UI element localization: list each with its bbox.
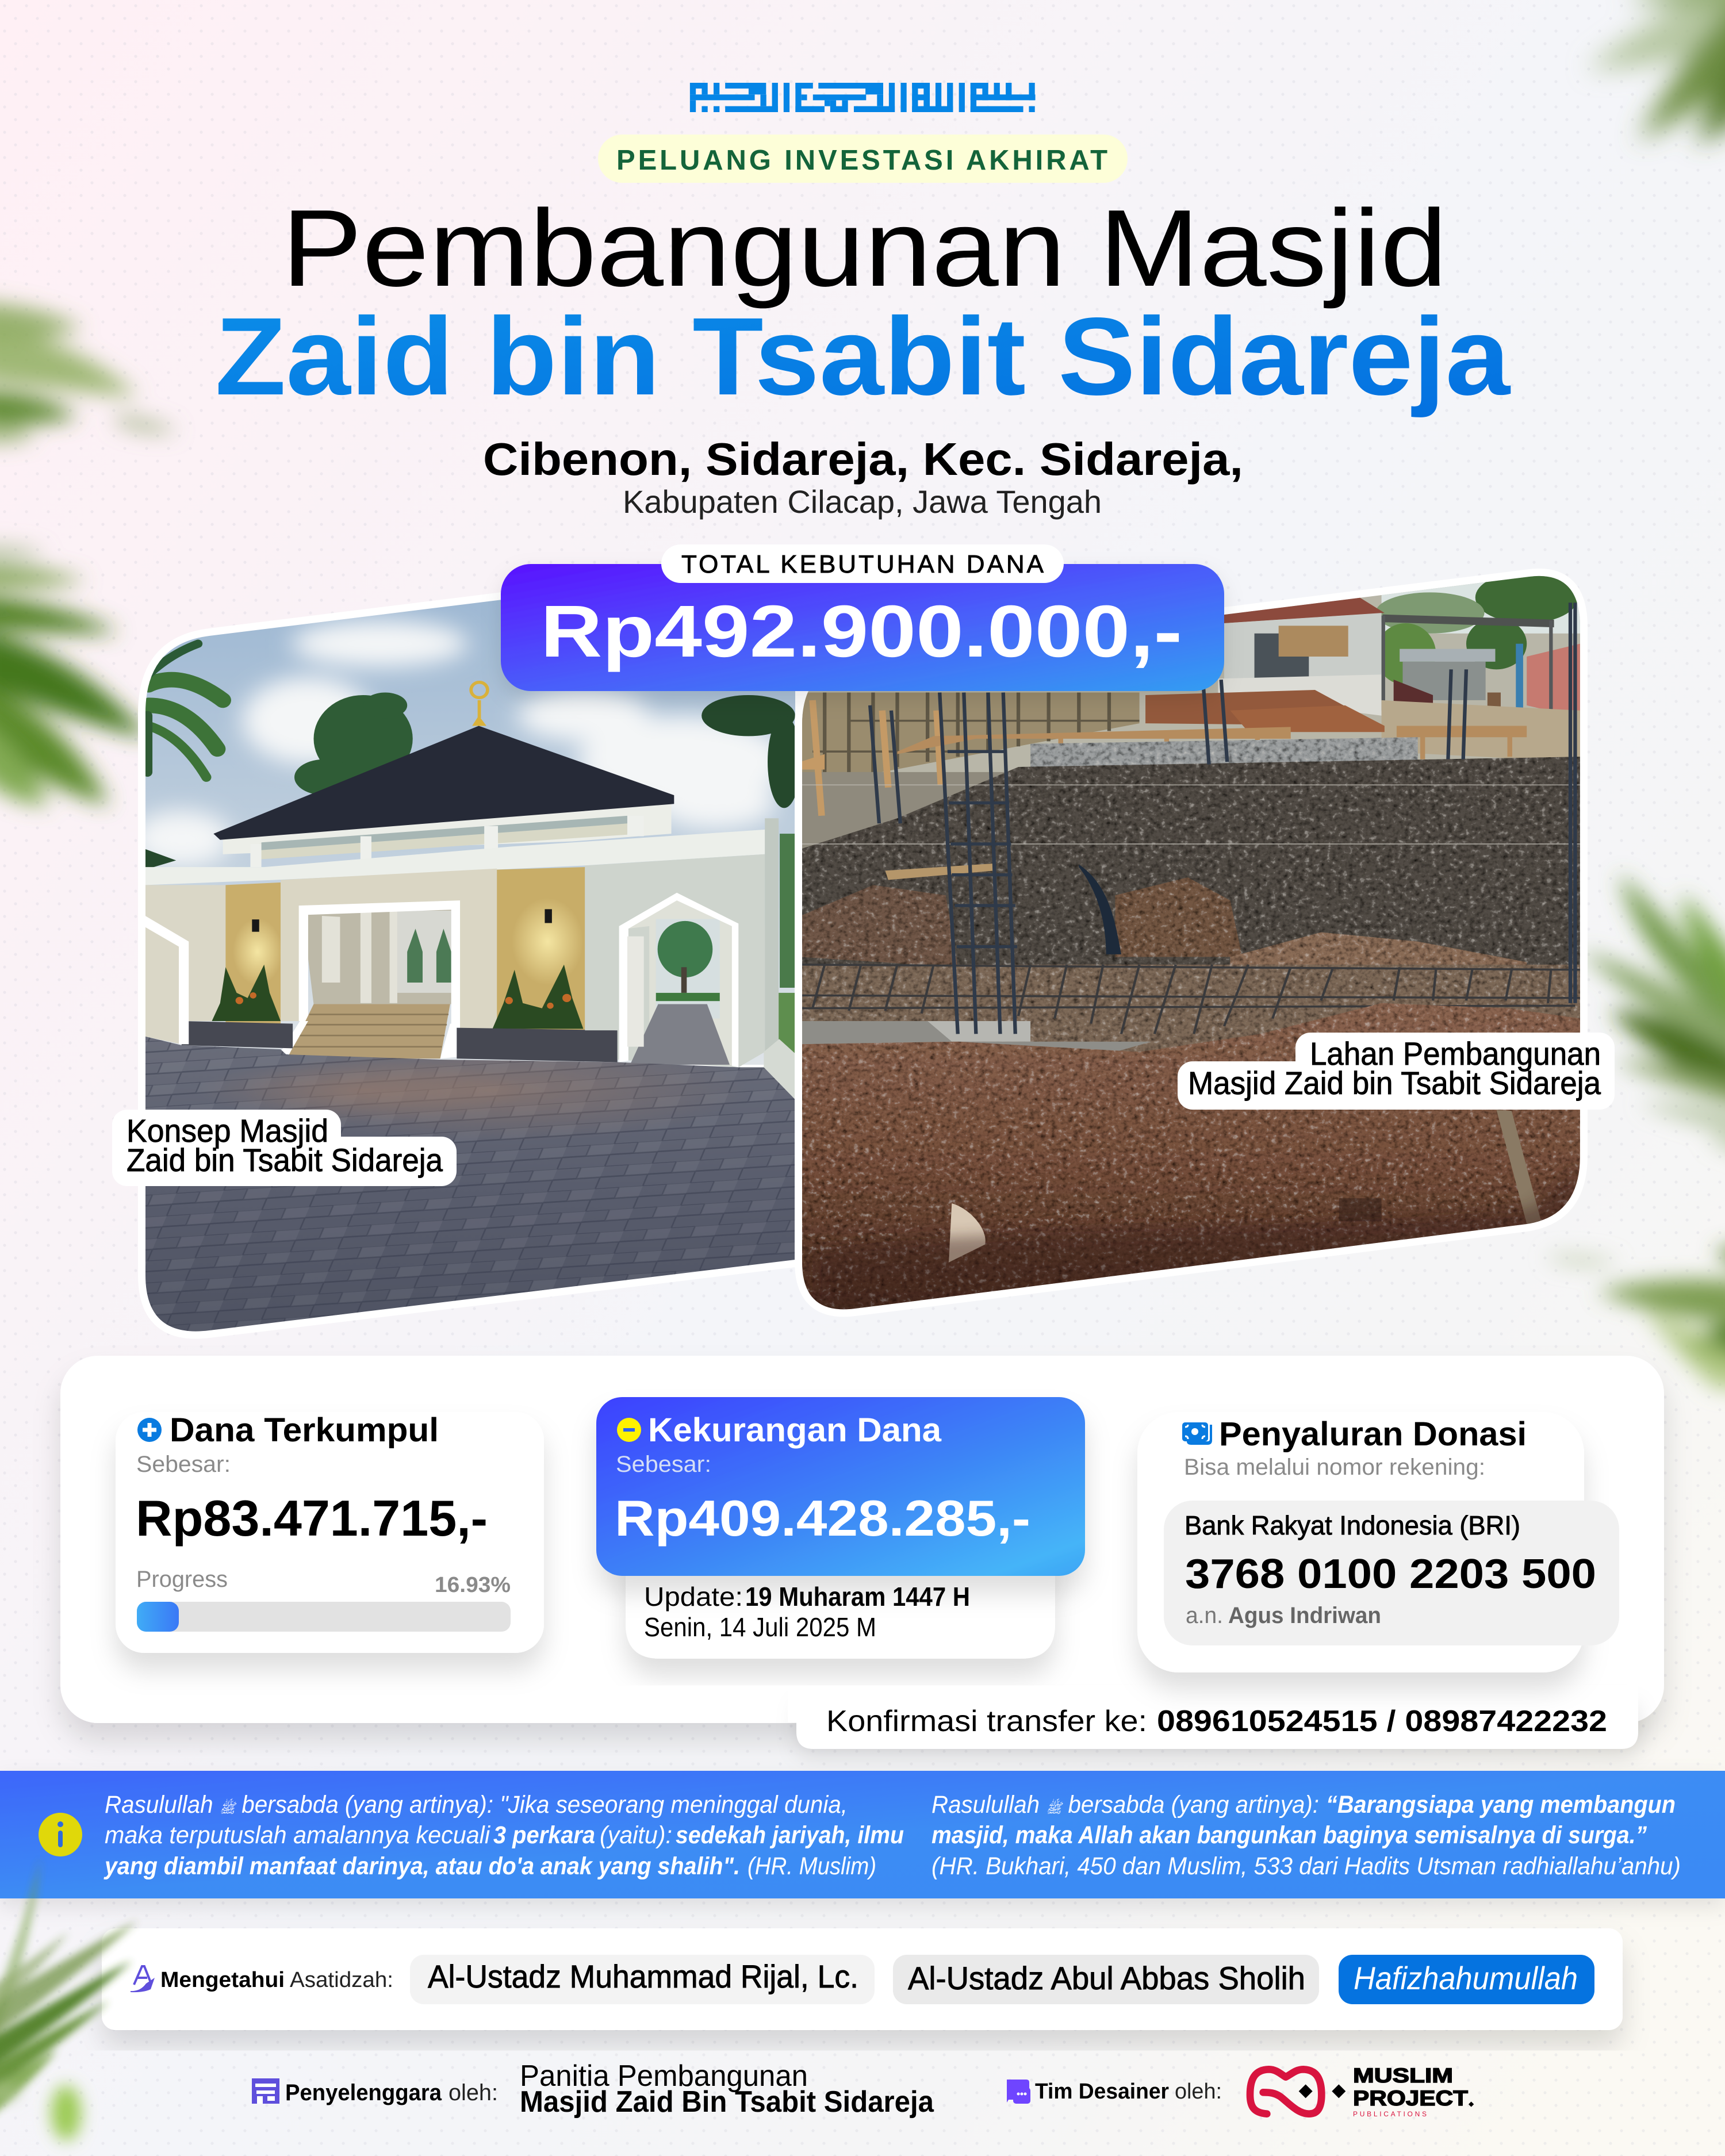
- designer credit: oleh:: [1175, 2080, 1222, 2104]
- icon: minus: [617, 1418, 641, 1442]
- location heading: [483, 433, 1243, 520]
- quote: building a mosque: Rasulullah ﷺ bersabda (yang artinya):: [931, 1791, 1319, 1819]
- bank account box: Agus Indriwan: [1228, 1603, 1381, 1628]
- card: donation channel: Bisa melalui nomor rekening:: [1184, 1455, 1485, 1480]
- location heading: Cibenon, Sidareja, Kec. Sidareja,: [483, 433, 1243, 485]
- caption: construction site: [1178, 1033, 1615, 1110]
- logo: muslim project: [1250, 2065, 1474, 2118]
- title: Pembangunan Masjid: [282, 187, 1447, 309]
- photo: mosque concept: [132, 563, 803, 1368]
- card: donation channel: [1137, 1412, 1619, 1672]
- icon: plus: [137, 1418, 162, 1442]
- organizer credit: Panitia Pembangunan: [520, 2059, 808, 2093]
- bank account box: a.n.: [1186, 1603, 1223, 1628]
- chip: scholar one: Al-Ustadz Muhammad Rijal, Lc.: [428, 1958, 858, 1994]
- icon: banknote: [1182, 1422, 1212, 1445]
- card: donation channel: Penyaluran Donasi: [1219, 1415, 1527, 1453]
- leaf: right: [1581, 874, 1725, 1156]
- logo: muslim project: MUSLIM: [1353, 2065, 1453, 2087]
- caption: mosque concept: Konsep Masjid: [126, 1112, 328, 1149]
- leaf: middle left: [0, 546, 150, 805]
- logo: muslim project: PROJECT: [1353, 2086, 1468, 2110]
- quote: three deeds: [103, 1791, 904, 1880]
- quote: building a mosque: masjid, maka Allah akan bangunkan baginya semisalnya di surga.”: [931, 1821, 1647, 1849]
- panel: funding: [60, 1356, 1664, 1749]
- card: update date: Update:: [644, 1582, 743, 1612]
- panel: endorsing scholars: Mengetahui: [160, 1968, 285, 1992]
- quote: three deeds: yang diambil manfaat darinya, atau do'a anak yang shalih".: [103, 1852, 740, 1880]
- quote: building a mosque: (HR. Bukhari, 450 dan Muslim, 533 dari Hadits Utsman radhiallahu’anhu): [931, 1852, 1681, 1880]
- quote: building a mosque: “Barangsiapa yang membangun: [1326, 1791, 1676, 1819]
- quote: three deeds: (HR. Muslim): [747, 1852, 876, 1880]
- icon: bismillah calligraphy: [690, 83, 1035, 112]
- quote: three deeds: sedekah jariyah, ilmu: [676, 1821, 904, 1849]
- icon: chat robot: [1007, 2080, 1030, 2104]
- panel: endorsing scholars: Asatidzah:: [290, 1968, 393, 1992]
- logo: muslim project: PUBLICATIONS: [1353, 2110, 1427, 2118]
- band: hadith quotes: [0, 1771, 1725, 1898]
- total fund callout: TOTAL KEBUTUHAN DANA: [681, 550, 1044, 578]
- card: funds collected: [116, 1411, 544, 1653]
- leaf: lower right: [1548, 1247, 1725, 1390]
- card: funds collected: Sebesar:: [136, 1452, 231, 1477]
- leaf: bottom small sprout: [0, 2085, 81, 2140]
- designer credit: Tim Desainer: [1035, 2080, 1169, 2104]
- chip: scholar one: [410, 1955, 875, 2004]
- card: funds collected: Rp83.471.715,-: [136, 1490, 488, 1547]
- card: funding shortfall: Sebesar:: [616, 1452, 711, 1477]
- quote: three deeds: Rasulullah ﷺ bersabda (yang artinya): "Jika seseorang meninggal dunia,: [105, 1791, 848, 1819]
- location heading: Kabupaten Cilacap, Jawa Tengah: [623, 484, 1102, 520]
- badge: peluang investasi akhirat: PELUANG INVESTASI AKHIRAT: [616, 145, 1107, 176]
- icon: info: [39, 1813, 82, 1856]
- card: funds collected: Progress: [136, 1567, 228, 1592]
- title: [215, 187, 1511, 418]
- card: update date: 19 Muharam 1447 H: [745, 1582, 970, 1612]
- quote: three deeds: (yaitu):: [600, 1821, 672, 1849]
- organizer credit: Penyelenggara: [285, 2080, 442, 2105]
- caption: construction site: Masjid Zaid bin Tsabit Sidareja: [1188, 1065, 1601, 1101]
- card: funding shortfall: Kekurangan Dana: [648, 1411, 942, 1449]
- bank account box: [1164, 1501, 1619, 1645]
- card: funding shortfall: Rp409.428.285,-: [615, 1490, 1030, 1547]
- designer credit: [1007, 2065, 1474, 2118]
- bank account box: Bank Rakyat Indonesia (BRI): [1184, 1510, 1520, 1540]
- progress bar: [137, 1602, 511, 1632]
- panel: endorsing scholars: [102, 1928, 1623, 2030]
- organizer credit: oleh:: [448, 2080, 498, 2105]
- leaf: bottom left: [0, 1857, 138, 2127]
- card: update date: Senin, 14 Juli 2025 M: [644, 1612, 876, 1642]
- confirmation tab: [788, 1685, 1638, 1749]
- chip: honorific: [1339, 1955, 1594, 2004]
- card: funding shortfall: [596, 1397, 1085, 1576]
- badge: peluang investasi akhirat: [598, 135, 1128, 183]
- leaf: top right: [1587, 0, 1725, 144]
- quote: three deeds: maka terputuslah amalannya kecuali: [105, 1821, 490, 1849]
- leaf: upper left: [0, 302, 178, 443]
- photo: construction site: [776, 572, 1624, 1317]
- card: update date: [626, 1552, 1055, 1659]
- quote: building a mosque: [931, 1791, 1681, 1880]
- bank account box: 3768 0100 2203 500: [1185, 1551, 1596, 1597]
- title: Zaid bin Tsabit Sidareja: [215, 294, 1511, 418]
- icon: building: [252, 2078, 279, 2104]
- confirmation tab: Konfirmasi transfer ke:: [826, 1705, 1147, 1738]
- chip: scholar two: Al-Ustadz Abul Abbas Sholih: [908, 1960, 1305, 1996]
- organizer credit: Masjid Zaid Bin Tsabit Sidareja: [520, 2085, 934, 2119]
- caption: construction site: Lahan Pembangunan: [1310, 1035, 1601, 1072]
- total fund callout: [501, 544, 1224, 691]
- caption: mosque concept: [112, 1110, 457, 1186]
- total fund callout: Rp492.900.000,-: [540, 590, 1182, 673]
- card: funds collected: 16.93%: [435, 1573, 511, 1597]
- caption: mosque concept: Zaid bin Tsabit Sidareja: [126, 1142, 443, 1178]
- confirmation tab: 089610524515 / 08987422232: [1157, 1705, 1607, 1738]
- organizer credit: [252, 2059, 934, 2119]
- chip: honorific: Hafizhahumullah: [1354, 1960, 1578, 1996]
- quote: three deeds: 3 perkara: [493, 1821, 595, 1849]
- card: funds collected: Dana Terkumpul: [170, 1411, 439, 1449]
- icon: pen signature: [131, 1966, 155, 1992]
